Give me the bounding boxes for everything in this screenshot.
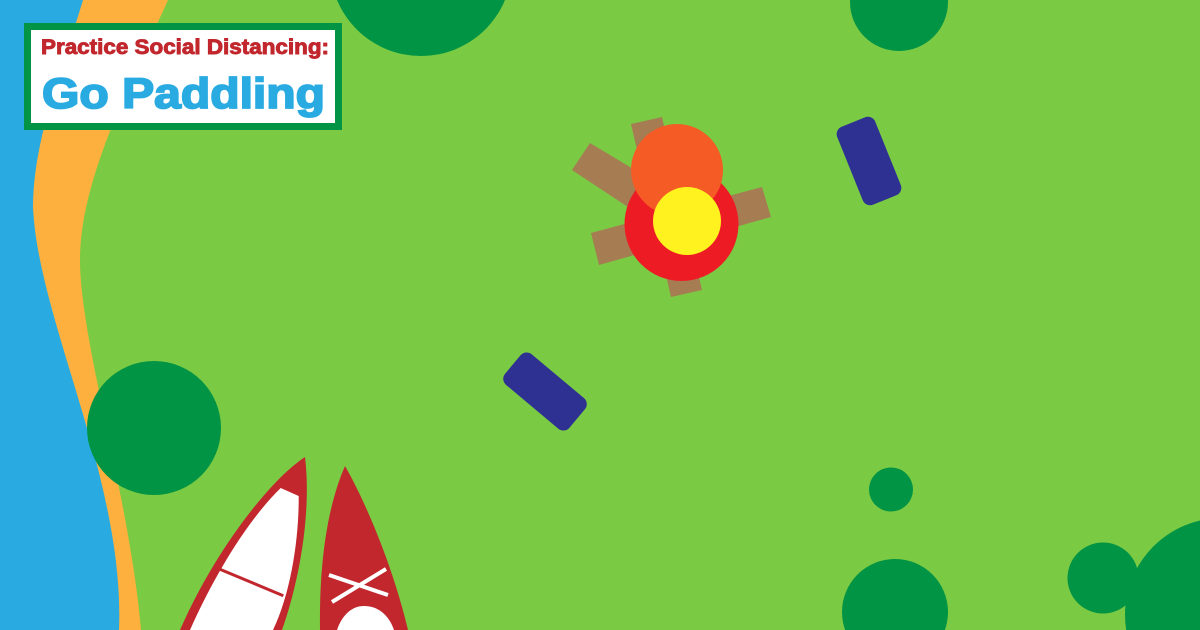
canoe interior bbox=[190, 488, 299, 630]
flame: orange bbox=[631, 124, 723, 216]
flame: yellow bbox=[653, 187, 721, 255]
subtitle: Practice Social Distancing: bbox=[41, 36, 329, 59]
logs bbox=[572, 117, 771, 297]
tree: left shore bbox=[87, 361, 221, 495]
tree: top centre bbox=[330, 0, 512, 56]
canoe hull bbox=[180, 457, 307, 630]
campfire bbox=[572, 117, 771, 297]
tree: small bbox=[869, 468, 913, 512]
kayak cockpit bbox=[337, 606, 394, 630]
seat: lower left bbox=[500, 349, 590, 434]
kayak: right bbox=[320, 466, 408, 630]
flame: red bbox=[624, 167, 738, 281]
kayak hull bbox=[320, 466, 408, 630]
title: Go Paddling bbox=[42, 70, 325, 118]
canoe thwart bbox=[219, 569, 283, 596]
tree: bottom right small bbox=[1068, 542, 1138, 614]
kayak paddles bbox=[329, 569, 388, 602]
title box bbox=[28, 26, 338, 126]
seat: upper right bbox=[834, 114, 904, 208]
tree: top right bbox=[850, 0, 948, 51]
canoe: left bbox=[180, 457, 307, 630]
water bbox=[0, 0, 119, 630]
shoreline: sand bbox=[0, 0, 168, 630]
tree: bottom right large bbox=[1125, 518, 1200, 630]
tree: bottom centre bbox=[842, 559, 948, 630]
